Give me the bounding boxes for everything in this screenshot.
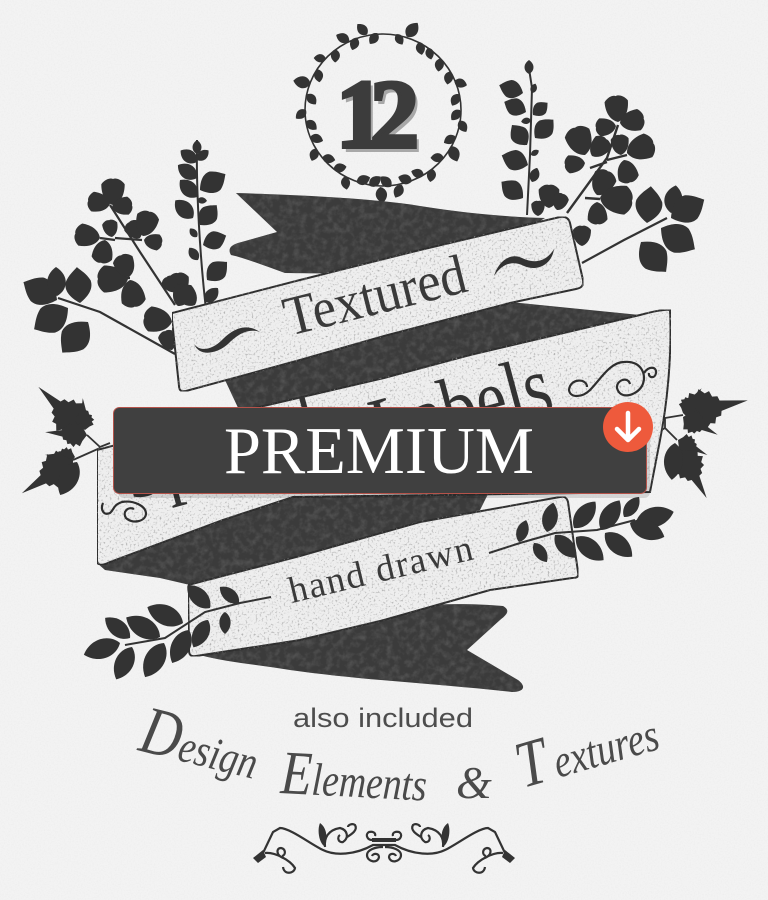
swirl: left: [102, 502, 146, 521]
caption: also included: also included: [293, 703, 473, 733]
banner lettering: [133, 361, 552, 508]
wreath stem and leaves: [292, 19, 470, 204]
ornament: left half: [253, 823, 384, 873]
squiggle: right: [494, 249, 554, 276]
maple sprig: right: [650, 380, 752, 506]
ribbon: dark fold between Textured and main banner: [225, 302, 640, 412]
sprig: right of hand drawn: [489, 493, 676, 567]
icon: download badge: [603, 402, 653, 452]
banner: hand drawn: [188, 497, 578, 656]
number 12: 1: [339, 65, 388, 173]
premium label: PREMIUM: [224, 414, 534, 488]
fern: left leaf branch: [17, 266, 175, 362]
ribbon: dark fold below main banner: [97, 490, 490, 585]
fern: right stem: [496, 60, 560, 215]
ornament: center bar: [372, 838, 396, 842]
premium bar: [114, 408, 650, 498]
banner: Textured: [172, 217, 583, 391]
main banner behind the premium bar: [97, 310, 671, 565]
squiggle: left: [194, 327, 260, 353]
number 12: 2: [370, 61, 419, 169]
wreath with number 12: [292, 19, 470, 204]
number 12: 2: [373, 65, 422, 173]
word: ampersand: &: [456, 757, 492, 808]
sprig: left of hand drawn: [81, 580, 271, 683]
ornament: right half: [384, 823, 515, 873]
ribbon: top swallowtail: [230, 193, 545, 275]
script words: [132, 692, 666, 815]
fern: left compound branch: [73, 179, 203, 353]
banner lettering: Labels: [360, 337, 562, 478]
fern: left stem: [170, 140, 234, 318]
swirl: right: [569, 362, 656, 396]
maple sprig: left: [12, 373, 110, 509]
number 12: [336, 61, 422, 173]
number 12: 1: [336, 61, 385, 169]
word: Elements: Elements: [278, 738, 429, 815]
banner lettering: Special: [110, 373, 330, 519]
word: Design: Design: [132, 692, 268, 794]
label text: Textured: [277, 243, 473, 349]
word: Textures: Textures: [507, 693, 666, 803]
fern: right leaf branch: [582, 184, 711, 281]
bottom ornament: [253, 823, 515, 873]
fern: right compound branch: [531, 95, 658, 246]
ribbon: bottom swallowtail: [200, 604, 523, 692]
label text: hand drawn: [285, 528, 477, 612]
